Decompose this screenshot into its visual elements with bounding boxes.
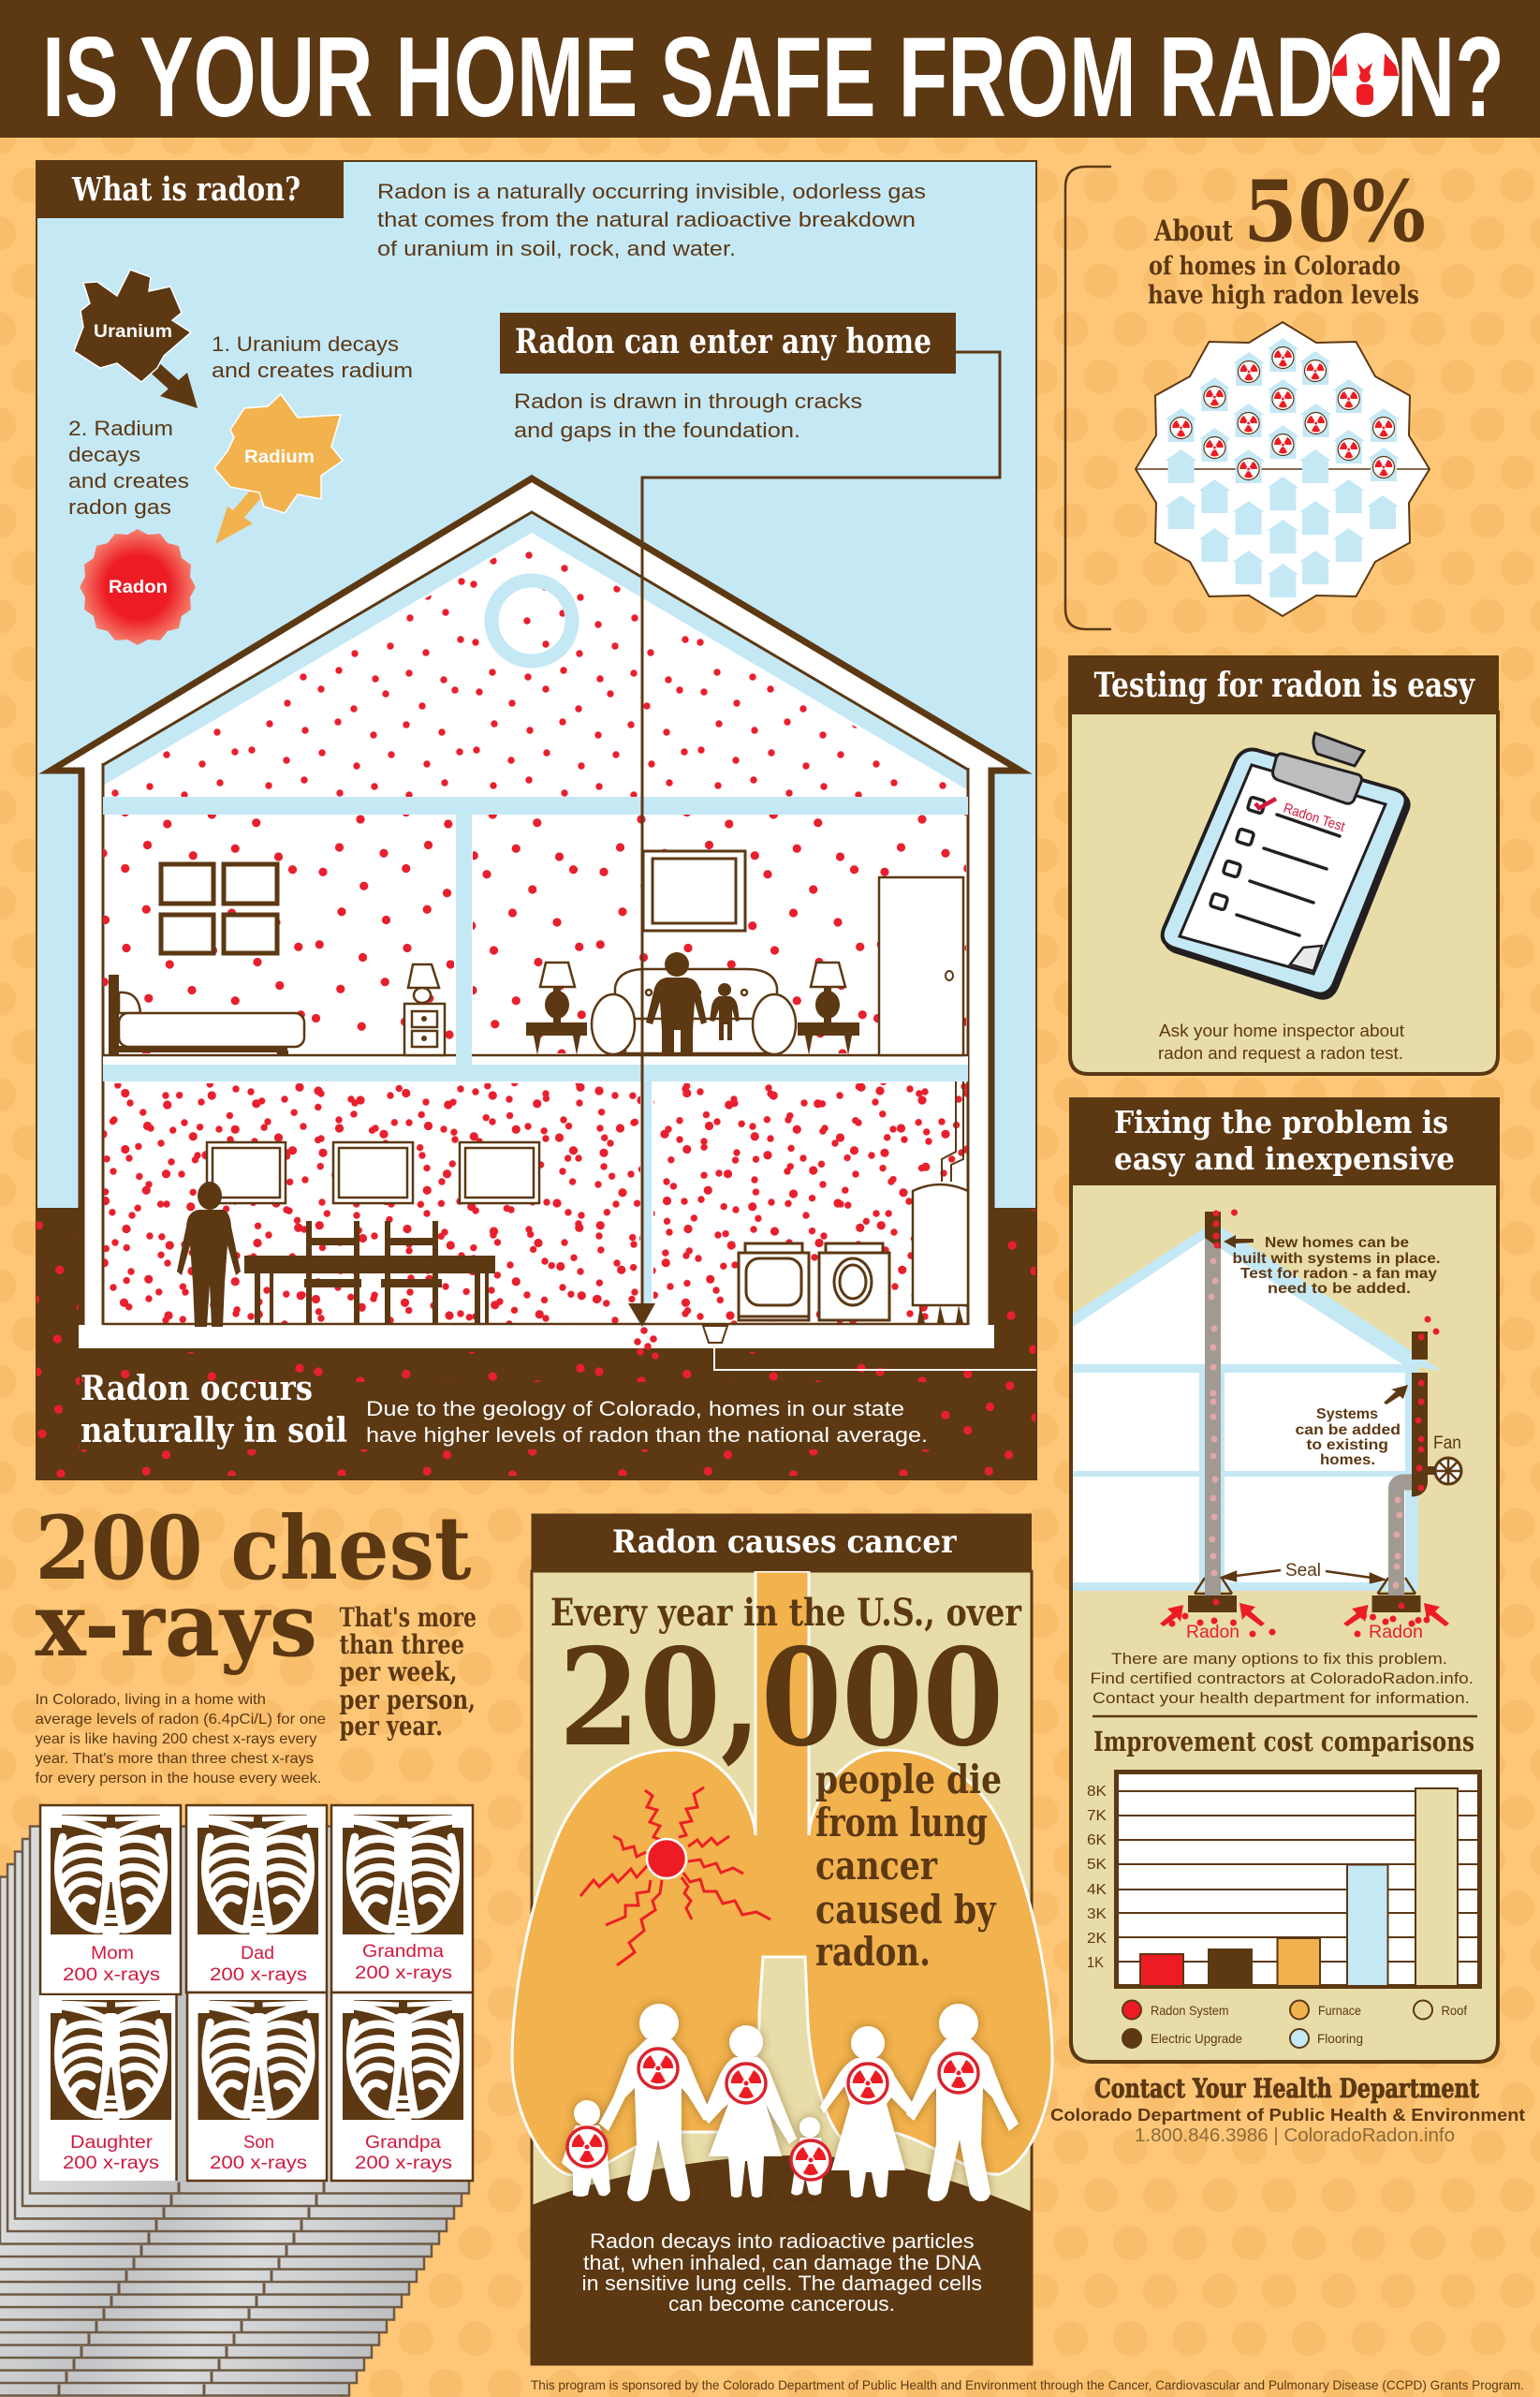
- text: radon definition: Radon is a naturally occurring invisible, odorless gas: [377, 180, 926, 203]
- contact block: Colorado Department of Public Health & Environment: [1050, 2106, 1525, 2125]
- text: people die: from lung: [815, 1800, 988, 1846]
- right side table and lamp: [798, 963, 859, 1055]
- heading: about 50%: have high radon levels: [1148, 281, 1419, 310]
- diagram: mitigation house: [1073, 1210, 1461, 1637]
- number: 20,000: 20,000: [559, 1619, 1004, 1776]
- header banner: [0, 0, 1540, 140]
- panel: fixing the problem: [1069, 1097, 1500, 2062]
- text: step 2: [68, 417, 189, 519]
- heading: 200 chest x-rays: 200 chest: [36, 1497, 472, 1600]
- nightstand and lamp: [404, 964, 445, 1055]
- x-ray card: grandpa: [331, 1993, 473, 2181]
- heading: fixing: easy and inexpensive: [1114, 1140, 1455, 1177]
- chart legend: [1122, 2000, 1467, 2048]
- text: how radon damages: can become cancerous.: [668, 2292, 895, 2316]
- text: more than three per week: [339, 1602, 477, 1742]
- bed: [109, 975, 304, 1055]
- contact block: 1.800.846.3986 | ColoradoRadon.info: [1135, 2125, 1455, 2146]
- text: Colorado geology: Due to the geology of Colorado, homes in our state: [366, 1397, 904, 1420]
- icon: radon gas: [80, 529, 196, 645]
- icon: clipboard: [1163, 733, 1409, 998]
- text: more than three per week: per person,: [339, 1684, 476, 1715]
- radon in pipes: [1213, 1210, 1440, 1609]
- heading: radon can enter any home: [500, 313, 956, 374]
- text: options: Find certified contractors at ColoradoRadon.info.: [1090, 1669, 1474, 1687]
- heading: radon causes cancer: Radon causes cancer: [612, 1523, 957, 1561]
- x-ray card: mom: [40, 1805, 181, 1994]
- figure: mother: [702, 2025, 797, 2198]
- x-ray card: dad: 200 x-rays: [210, 1965, 307, 1985]
- chart legend: Flooring: [1317, 2031, 1363, 2046]
- attic radon dots: [103, 536, 968, 797]
- bracket: [1065, 167, 1111, 629]
- y-axis labels: 4K: [1087, 1882, 1107, 1898]
- icon: uranium rock and arrow: [74, 270, 198, 408]
- icon: radium rock and arrow: Radium: [244, 448, 315, 467]
- text: radon definition: of uranium in soil, rock, and water.: [377, 237, 736, 260]
- text: how radon damages: [582, 2229, 982, 2316]
- y-axis labels: 2K: [1087, 1931, 1107, 1947]
- heading: about 50%: of homes in Colorado: [1149, 252, 1401, 281]
- plain houses: [1166, 449, 1399, 597]
- text: more than three per week: per week,: [339, 1656, 457, 1687]
- contact block: [1050, 2073, 1525, 2146]
- arrows: radon entry: [1160, 1603, 1449, 1637]
- x-ray card: grandma: Grandma: [362, 1942, 444, 1962]
- heading: 200 chest x-rays: x-rays: [36, 1574, 317, 1677]
- heading: about 50%: [1148, 162, 1426, 310]
- chart legend: Electric Upgrade: [1151, 2031, 1242, 2046]
- text: new homes: [1232, 1235, 1440, 1297]
- soil hill: [532, 2155, 1032, 2364]
- icon: fan: [1428, 1458, 1461, 1484]
- text: x-ray explanation: year. That's more than three chest x-rays: [36, 1751, 314, 1767]
- text: more than three per week: per year.: [339, 1711, 443, 1742]
- label: seal: Seal: [1285, 1561, 1321, 1581]
- figure: father: [599, 2004, 711, 2201]
- y-axis labels: 5K: [1087, 1857, 1107, 1873]
- heading: what is radon: [37, 161, 344, 218]
- seal wedges: [1195, 1578, 1415, 1594]
- figure: small child left: [562, 2100, 610, 2197]
- icon: uranium rock and arrow: Uranium: [94, 322, 172, 342]
- icon: radium rock and arrow: [214, 394, 343, 544]
- text: how radon damages: Radon decays into radioactive particles: [590, 2229, 974, 2253]
- text: step 2: radon gas: [68, 495, 171, 519]
- text: step 1: and creates radium: [212, 359, 413, 382]
- arrow: connector from heading to foundation: [628, 352, 1000, 1327]
- text: people die: people die: [815, 1757, 1002, 1802]
- x-ray card: daughter: 200 x-rays: [63, 2154, 159, 2173]
- sofa: [592, 969, 796, 1054]
- panel: radon causes cancer: [512, 1513, 1052, 2364]
- heading: testing: [1068, 655, 1499, 713]
- text: how radon damages: in sensitive lung cells. The damaged cells: [582, 2272, 982, 2295]
- figure: small child middle: [791, 2117, 824, 2195]
- soil: [37, 1208, 1036, 1479]
- heading: about 50%: 50%: [1243, 162, 1426, 261]
- text: existing homes: [1296, 1406, 1401, 1468]
- text: ask your inspector: [1158, 1022, 1404, 1063]
- x-ray card: dad: [186, 1805, 327, 1993]
- bar chart: improvement cost: [1087, 1772, 1479, 1987]
- panel: 50 percent of homes: [1065, 162, 1430, 629]
- heading: radon occurs naturally in soil: Radon occurs: [81, 1369, 313, 1408]
- text: people die: caused by: [815, 1887, 997, 1933]
- text: more than three per week: than three: [339, 1629, 464, 1660]
- text: options: [1090, 1650, 1474, 1707]
- text: ask your inspector: radon and request a radon test.: [1158, 1044, 1403, 1063]
- text: people die: [815, 1757, 1002, 1975]
- arrow: seal pointers: [1223, 1570, 1384, 1582]
- heading: about 50%: About: [1153, 214, 1234, 248]
- text: new homes: built with systems in place.: [1232, 1251, 1440, 1267]
- floors and walls: [103, 797, 968, 1324]
- text: cracks and gaps: and gaps in the foundation.: [514, 419, 800, 442]
- text: people die: cancer: [815, 1843, 938, 1889]
- text: x-ray explanation: average levels of radon (6.4pCi/L) for one: [36, 1712, 326, 1728]
- dining table and chairs: [244, 1221, 495, 1323]
- figure: grandmother: [820, 2026, 917, 2198]
- arrow: existing homes pointer: [1384, 1385, 1408, 1404]
- text: new homes: New homes can be: [1265, 1235, 1409, 1251]
- x-ray card: son: Son: [243, 2133, 274, 2153]
- water heater: [913, 1081, 968, 1323]
- text: Colorado geology: have higher levels of radon than the national average.: [366, 1423, 928, 1447]
- y-axis labels: 8K: [1087, 1784, 1107, 1800]
- heading: 200 chest x-rays: [36, 1497, 472, 1677]
- footer credit: This program is sponsored by the Colorado Department of Public Health and Environment through the Cancer, Cardiovascular and Pulmonary Disease (CCPD) Grants Program.: [531, 2377, 1524, 2392]
- figure: grandfather mirrored: [906, 2004, 1019, 2201]
- heading: radon occurs naturally in soil: naturally in soil: [81, 1411, 347, 1450]
- text: existing homes: to existing: [1307, 1437, 1388, 1453]
- text: cracks and gaps: [514, 390, 862, 442]
- panel: what is radon and house: [37, 161, 1036, 1479]
- y-axis labels: 1K: [1087, 1955, 1104, 1971]
- x-ray card: son: [187, 1993, 327, 2181]
- heading: fixing: Fixing the problem is: [1114, 1104, 1448, 1140]
- section: 200 chest x-rays: [0, 1497, 477, 2397]
- x-ray card: grandma: 200 x-rays: [355, 1963, 452, 1983]
- x-ray card: son: 200 x-rays: [210, 2154, 307, 2173]
- radon houses: [1166, 338, 1400, 483]
- heading: fixing: [1069, 1097, 1500, 1184]
- left side table and lamp: [526, 963, 587, 1055]
- text: Colorado geology: [366, 1397, 928, 1447]
- y-axis labels: 7K: [1087, 1808, 1107, 1824]
- basement windows: [207, 1142, 539, 1203]
- panel: testing for radon: [1068, 655, 1499, 1074]
- text: x-ray explanation: In Colorado, living in a home with: [36, 1692, 266, 1708]
- text: existing homes: homes.: [1320, 1452, 1375, 1468]
- x-ray card: grandma: [331, 1805, 473, 1993]
- text: ask your inspector: Ask your home inspector about: [1159, 1022, 1404, 1040]
- text: step 1: 1. Uranium decays: [212, 332, 399, 356]
- text: cracks and gaps: Radon is drawn in through cracks: [514, 390, 862, 413]
- bedroom window panes: [161, 864, 277, 953]
- lungs: [512, 1571, 1052, 2175]
- text: how radon damages: that, when inhaled, can damage the DNA: [583, 2251, 981, 2274]
- icon: clipboard: Radon Test: [1282, 801, 1347, 835]
- heading: radon occurs naturally in soil: [81, 1369, 347, 1450]
- x-ray card: mom: Mom: [91, 1944, 134, 1963]
- chart legend: Radon System: [1151, 2003, 1228, 2018]
- text: step 1: [212, 332, 413, 382]
- upper floor radon dots: [103, 815, 966, 1053]
- stack of x-ray sheets: [0, 1826, 469, 2397]
- text: x-ray explanation: for every person in the house every week.: [36, 1771, 322, 1787]
- radiation badges on family: [567, 2049, 978, 2180]
- family holding hands: [562, 2004, 1019, 2201]
- pipe: new home: [1188, 1212, 1237, 1612]
- x-ray card: mom: 200 x-rays: [63, 1965, 160, 1985]
- text: existing homes: can be added: [1296, 1422, 1401, 1438]
- label: fan: Fan: [1433, 1434, 1461, 1453]
- text: step 2: and creates: [68, 469, 189, 493]
- x-ray card: grandpa: 200 x-rays: [355, 2154, 452, 2173]
- x-ray card: daughter: [39, 1995, 177, 2181]
- text: radon definition: [377, 180, 926, 260]
- icon: radiation letter O in title: [1331, 33, 1399, 116]
- basement radon dots: [104, 1083, 967, 1323]
- sump pit and pipe: [703, 1326, 1036, 1370]
- icon: radon gas: Radon: [109, 578, 168, 597]
- standing person: [177, 1182, 241, 1327]
- text: people die: radon.: [815, 1929, 931, 1975]
- soil radon dots: [37, 1210, 1035, 1478]
- house outline: [51, 478, 1020, 1348]
- text: options: Contact your health department for information.: [1093, 1689, 1470, 1707]
- arrow: new homes pointer: [1224, 1235, 1254, 1248]
- text: existing homes: Systems: [1316, 1406, 1378, 1422]
- text: new homes: need to be added.: [1268, 1281, 1411, 1297]
- text: more than three per week: That's more: [339, 1602, 477, 1633]
- y-axis labels: [1087, 1784, 1107, 1971]
- x-ray card: grandpa: Grandpa: [365, 2133, 441, 2153]
- text: options: There are many options to fix this problem.: [1111, 1650, 1447, 1668]
- heading: radon causes cancer: [532, 1513, 1032, 1571]
- icon: radiating radon particle: [580, 1787, 770, 1965]
- text: x-ray explanation: [36, 1692, 326, 1787]
- text: step 2: decays: [68, 443, 140, 466]
- dryer: [819, 1243, 889, 1320]
- text: x-ray explanation: year is like having 200 chest x-rays every: [36, 1731, 316, 1747]
- living room picture: [643, 851, 745, 931]
- text: step 2: 2. Radium: [68, 417, 173, 440]
- washer: [739, 1243, 809, 1320]
- x-ray card: daughter: Daughter: [70, 2133, 154, 2153]
- chart legend: Furnace: [1318, 2003, 1361, 2018]
- pipe: existing home: [1372, 1331, 1428, 1612]
- door: [879, 877, 963, 1055]
- bars: [1140, 1788, 1458, 1986]
- chart legend: Roof: [1442, 2003, 1467, 2018]
- label: radon right: Radon: [1369, 1623, 1423, 1642]
- badge: star of houses: [1136, 322, 1430, 616]
- text: every year in the US: Every year in the U.S., over: [550, 1591, 1022, 1635]
- y-axis labels: 3K: [1087, 1906, 1107, 1922]
- text: new homes: Test for radon - a fan may: [1240, 1266, 1437, 1282]
- text: radon definition: that comes from the natural radioactive breakdown: [377, 208, 916, 231]
- x-ray card: dad: Dad: [241, 1944, 274, 1963]
- heading: radon can enter any home: Radon can enter any home: [515, 322, 931, 361]
- attic round window: [491, 581, 572, 661]
- adult and child on sofa: [646, 952, 740, 1055]
- radon entering at foundation crack: [634, 1327, 659, 1360]
- heading: what is radon: What is radon?: [71, 170, 301, 209]
- y-axis labels: 6K: [1087, 1832, 1107, 1848]
- label: radon left: Radon: [1186, 1623, 1239, 1642]
